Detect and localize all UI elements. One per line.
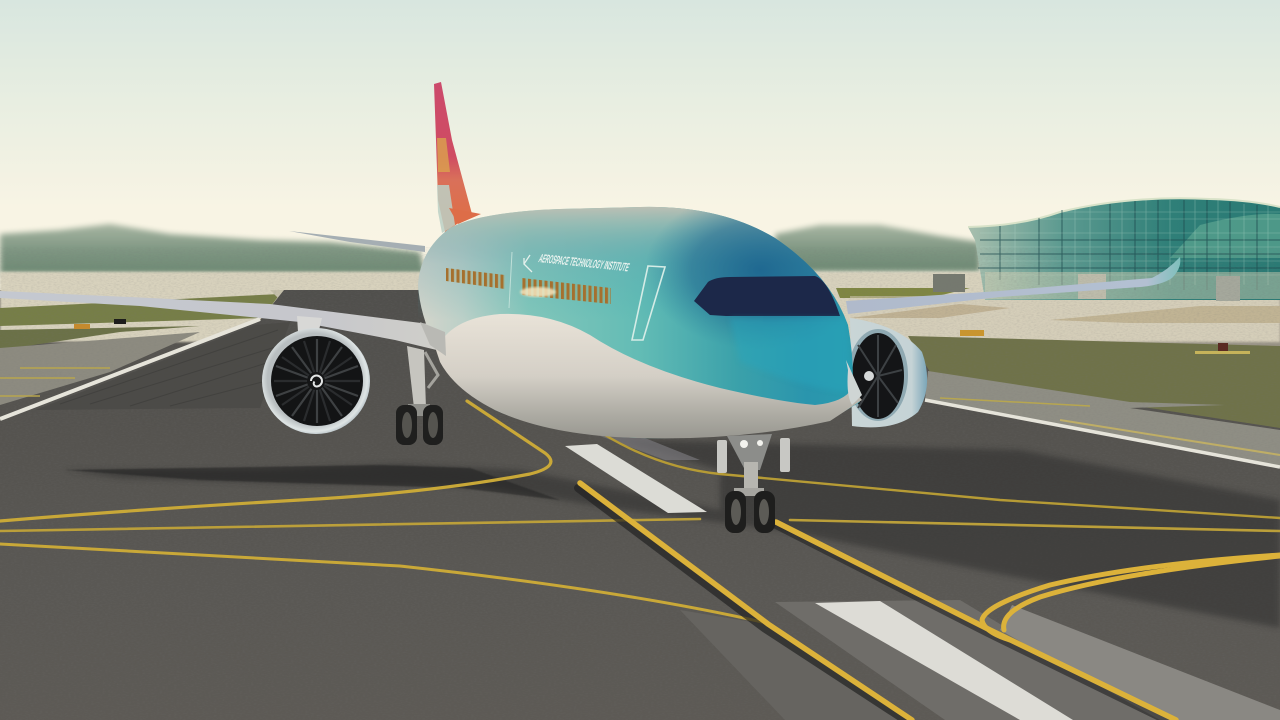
service road right [925,371,1280,468]
left engine [262,328,370,434]
left wing [0,291,445,352]
nose landing gear [717,434,790,533]
right engine [848,318,927,427]
logo mark [524,255,532,272]
radome lower sheen [732,315,848,362]
right grass strip [908,336,1280,428]
left grass strips [0,290,420,405]
wing root [420,322,446,356]
left main landing gear [396,346,443,445]
cabin windows front row [446,268,505,289]
worn concrete apron [35,322,290,410]
tail fin [434,82,481,233]
cabin windows rear row [522,278,611,304]
belly fairing [436,314,862,438]
aircraft ground shadow [65,440,1280,628]
runway marking stripes [565,436,1073,720]
taxiway surface [0,290,1280,720]
distant tree lines [0,224,980,274]
light patch bottom right concrete [680,600,1280,720]
fuselage [418,190,875,438]
passenger door outline [632,266,665,340]
fuselage: AEROSPACE TECHNOLOGY INSTITUTE [537,252,631,274]
sky background [0,0,1280,290]
distant airfield ground [0,272,1280,346]
cockpit windshield [694,276,840,316]
window reflection [520,287,556,297]
tarmac texture [0,290,1280,720]
right wing [846,257,1180,314]
runway edge lines [0,319,1280,467]
yellow taxiway lines [0,401,1280,720]
airfield signs [74,319,1250,354]
far horizontal stabilizer [289,231,425,252]
terminal building [933,198,1280,301]
